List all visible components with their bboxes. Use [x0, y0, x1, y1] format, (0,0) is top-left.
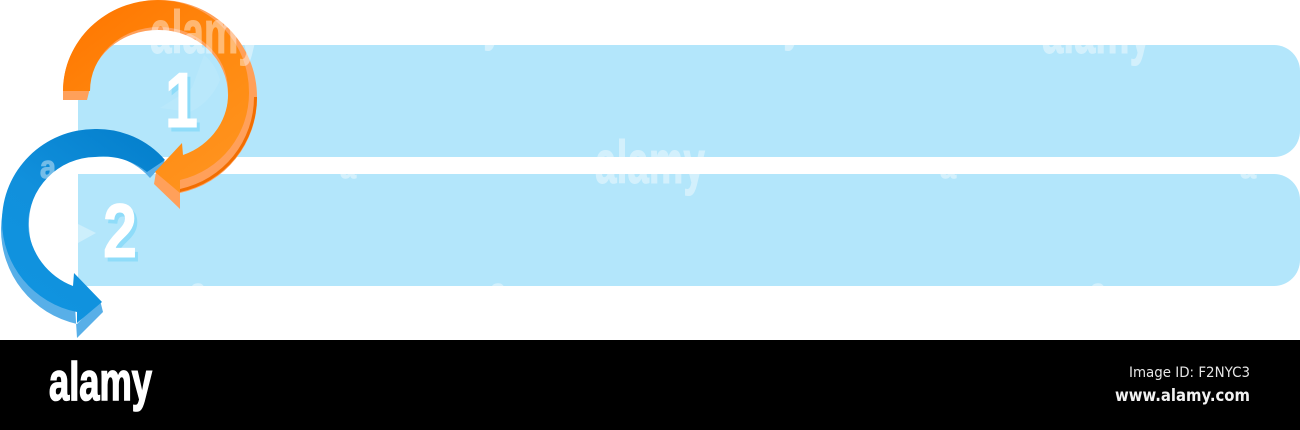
arrow: orange	[63, 0, 257, 209]
number 1: 1	[168, 60, 201, 148]
watermarks: a	[490, 272, 506, 308]
watermarks: a	[1240, 149, 1256, 185]
image id: Image ID: F2NYC3	[1129, 365, 1250, 381]
watermarks: alamy	[150, 0, 260, 66]
watermarks: a	[40, 149, 56, 185]
number 2: 2	[103, 189, 137, 274]
panel: row 1	[78, 45, 1300, 157]
number 1: 1	[165, 56, 198, 144]
watermarks: a	[190, 272, 206, 308]
watermarks	[40, 0, 1256, 308]
watermarks: alamy	[1042, 0, 1151, 66]
background	[0, 0, 1300, 340]
watermarks: a	[1090, 272, 1106, 308]
watermarks: a	[940, 149, 956, 185]
faint swirl behind number 1	[160, 55, 220, 112]
website: www.alamy.com	[1115, 386, 1250, 405]
footer logo: alamy	[49, 352, 152, 412]
footer band	[0, 340, 1300, 430]
panel: row 2	[78, 174, 1300, 286]
faint triangle marker in row 2	[78, 224, 96, 243]
watermarks: alamy	[595, 129, 705, 196]
watermarks: a	[340, 149, 356, 185]
arrow: blue	[1, 129, 165, 338]
number 2: 2	[106, 193, 140, 278]
